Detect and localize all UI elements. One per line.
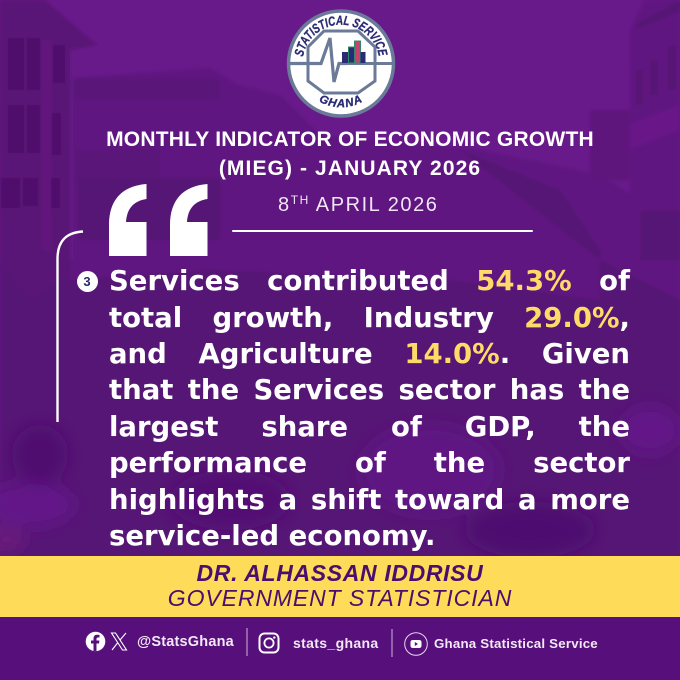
title: [106, 128, 594, 180]
footer social bar: [86, 628, 598, 657]
icon: instagram: [258, 632, 280, 654]
quote text block: largest share of GDP, the: [109, 410, 630, 442]
speaker name: DR. ALHASSAN IDDRISU: [197, 560, 483, 586]
name banner: [0, 556, 680, 617]
quote text block: [109, 265, 630, 552]
icon: opening quotation marks: [109, 184, 208, 256]
quote text block: performance of the sector: [109, 447, 630, 479]
channel name: Ghana Statistical Service: [434, 636, 598, 651]
logo: Ghana Statistical Service: STATISTICAL SERVICE: [294, 16, 388, 56]
speaker title: GOVERNMENT STATISTICIAN: [168, 585, 512, 611]
quote text block: and Agriculture 14.0%. Given: [109, 338, 630, 370]
number badge 3: 3: [83, 274, 91, 289]
handle: stats_ghana: stats_ghana: [293, 635, 379, 651]
handle: StatsGhana: @StatsGhana: [137, 634, 234, 650]
icon: youtube: [404, 632, 428, 656]
divider line beside quote: [232, 230, 533, 232]
logo: Ghana Statistical Service: [286, 9, 396, 118]
logo: Ghana Statistical Service: GHANA: [320, 95, 362, 108]
quote text block: highlights a shift toward a more: [109, 484, 630, 516]
quote text block: Services contributed 54.3% of: [109, 265, 630, 297]
title: (MIEG) - JANUARY 2026: [219, 157, 481, 180]
date: 8TH APRIL 2026: [278, 193, 438, 216]
icon: facebook: [86, 632, 106, 652]
separators: [246, 628, 392, 657]
number badge 3: [76, 271, 98, 292]
bracket line left of quote: [56, 230, 84, 422]
quote text block: that the Services sector has the: [109, 374, 630, 406]
quote text block: total growth, Industry 29.0%,: [109, 302, 630, 334]
icon: X: [110, 632, 128, 650]
title: MONTHLY INDICATOR OF ECONOMIC GROWTH: [106, 128, 594, 151]
quote text block: service-led economy.: [109, 520, 435, 552]
